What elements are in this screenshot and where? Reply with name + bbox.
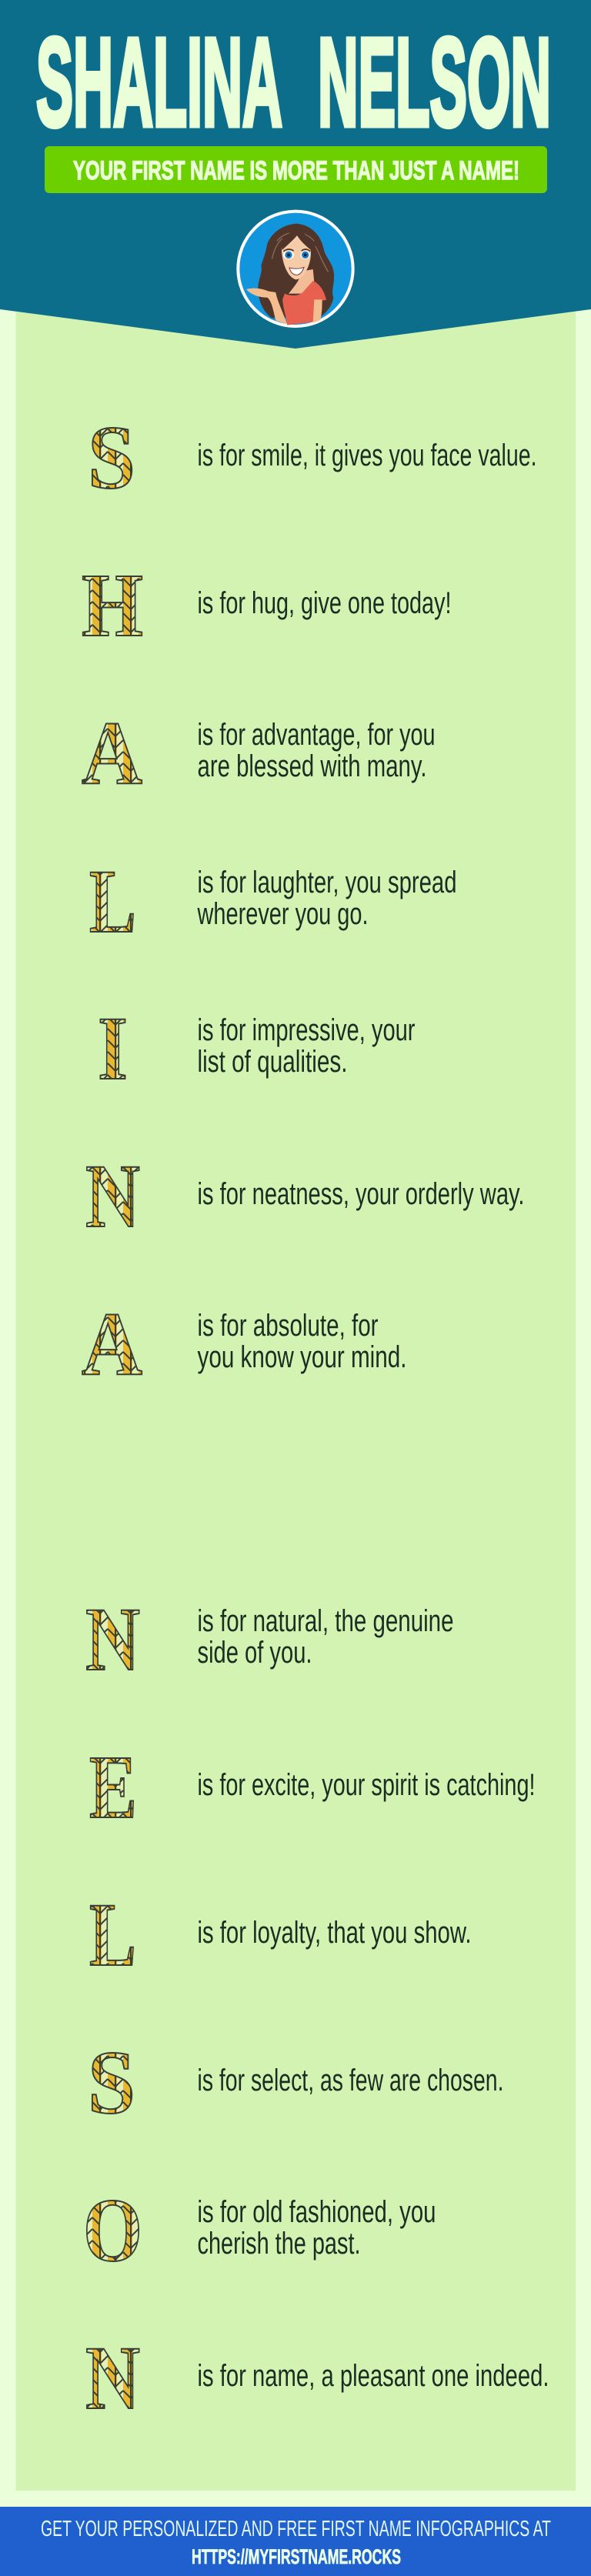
text: absolute: you know your mind. [197, 1340, 406, 1374]
title: SHALINA [36, 12, 282, 152]
letter I: I [98, 998, 128, 1099]
row: I [98, 998, 416, 1099]
text: impressive: list of qualities. [197, 1045, 348, 1079]
text: loyalty: is for loyalty, that you show. [197, 1916, 471, 1950]
text: laughter: is for laughter, you spread [197, 866, 457, 899]
letter A: A [82, 1293, 142, 1394]
letter O: O [83, 2180, 142, 2281]
text: old fashioned: cherish the past. [197, 2227, 360, 2261]
row: S [88, 2032, 503, 2133]
row: S [88, 407, 537, 508]
row: N [85, 1146, 525, 1246]
letter N: N [85, 1146, 140, 1246]
text: hug: is for hug, give one today! [197, 586, 451, 620]
text: old fashioned: is for old fashioned, you [197, 2195, 436, 2229]
letter S: S [88, 407, 135, 508]
text: old fashioned [197, 2195, 436, 2261]
text: laughter: wherever you go. [197, 897, 368, 931]
subtitle banner [45, 146, 547, 193]
text: advantage [197, 718, 436, 783]
row: A [82, 1293, 406, 1394]
letter L: L [89, 1884, 136, 1985]
row: L [89, 851, 457, 952]
row: H [82, 555, 451, 656]
row: E [89, 1737, 536, 1837]
footer [0, 2507, 591, 2576]
text: impressive: is for impressive, your [197, 1013, 416, 1047]
letter S: S [88, 2032, 135, 2133]
letter N: N [85, 2327, 140, 2428]
letter L: L [89, 851, 136, 952]
text: natural: side of you. [197, 1636, 312, 1670]
text: absolute [197, 1309, 406, 1374]
header banner [0, 0, 591, 349]
row: O [83, 2180, 436, 2281]
icon: avatar portrait [238, 212, 353, 326]
footer url: HTTPS://MYFIRSTNAME.ROCKS [192, 2545, 401, 2568]
row: L [89, 1884, 471, 1985]
text: natural: is for natural, the genuine [197, 1604, 454, 1638]
text: absolute: is for absolute, for [197, 1309, 379, 1343]
letter N: N [85, 1589, 140, 1690]
text: natural [197, 1604, 454, 1670]
row: A [82, 702, 436, 803]
row: N [85, 2327, 549, 2428]
letter E: E [89, 1737, 137, 1837]
row: N [85, 1589, 454, 1690]
text: advantage: are blessed with many. [197, 749, 426, 783]
text: laughter [197, 866, 457, 931]
letter H: H [82, 555, 143, 656]
letter A: A [82, 702, 142, 803]
text: impressive [197, 1013, 416, 1079]
text: advantage: is for advantage, for you [197, 718, 436, 752]
